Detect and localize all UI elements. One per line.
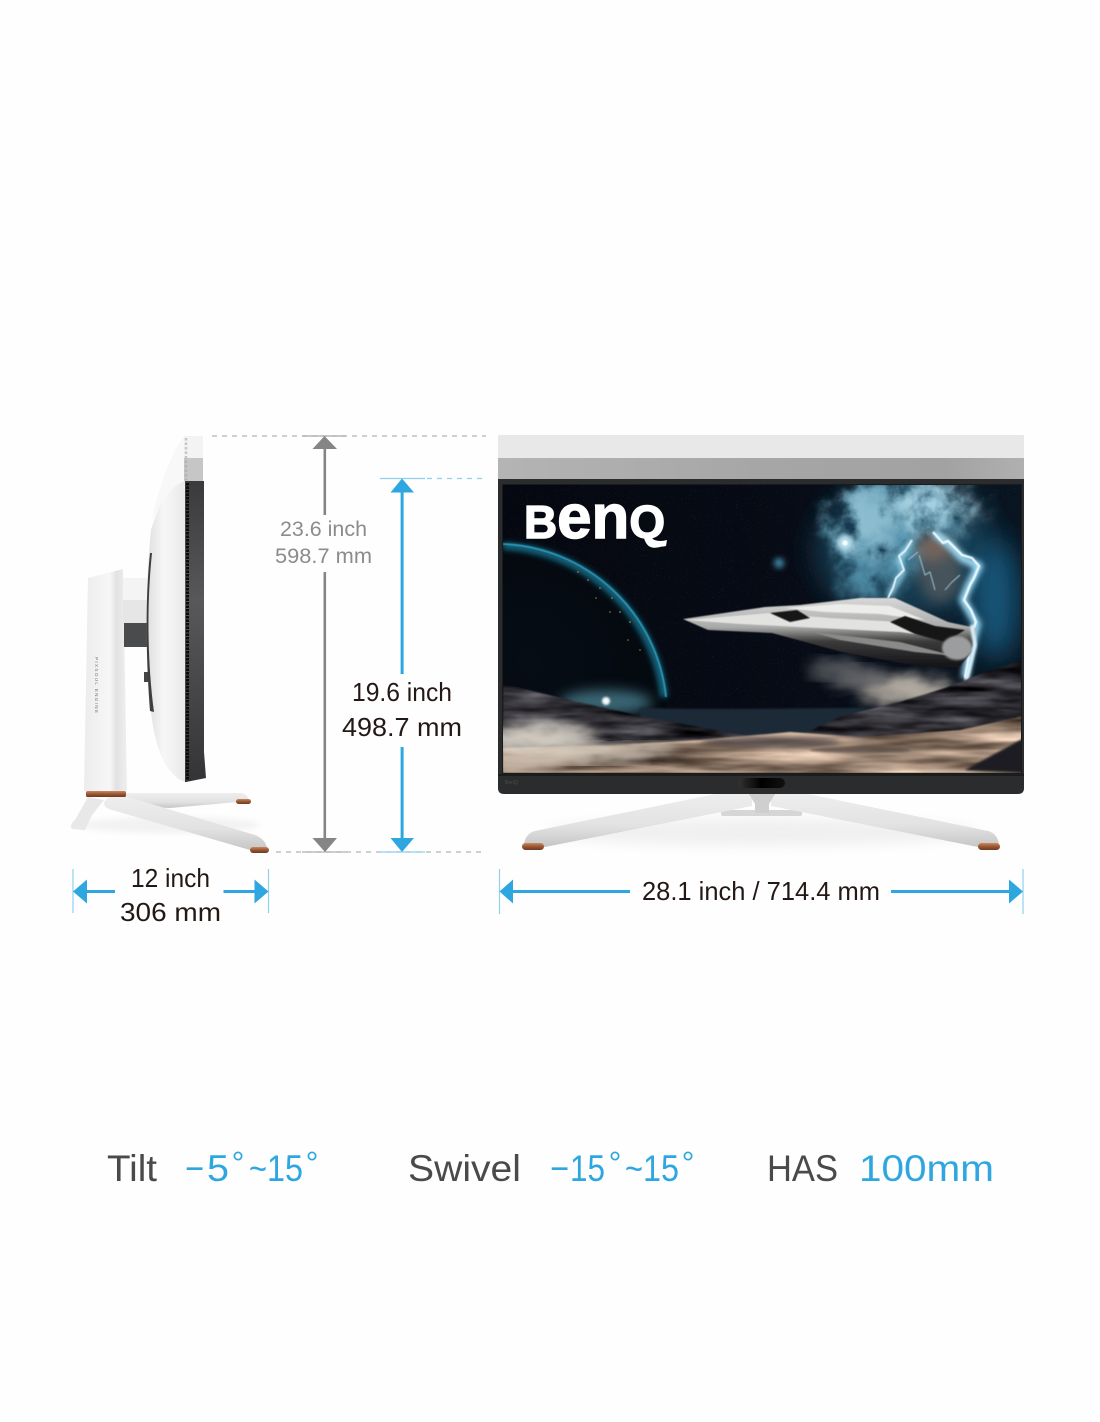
total height label: 23.6 inch	[280, 518, 367, 541]
front view monitor	[498, 435, 1024, 850]
monitor chin details: BenQ	[505, 780, 518, 786]
logo on screen: BenQ	[524, 483, 665, 552]
side view monitor	[71, 436, 269, 853]
side stand legs	[71, 793, 267, 850]
swivel spec: −	[550, 1148, 569, 1189]
column lettering: PIXSOUL ENGINE	[94, 657, 99, 713]
horizon glow	[560, 690, 652, 714]
swivel spec	[408, 1145, 694, 1189]
screen inner border	[502, 484, 1022, 774]
side depth label: 12 inch	[131, 863, 210, 893]
side depth arrows	[73, 869, 268, 913]
starfield	[503, 485, 1021, 725]
side depth label: 306 mm	[120, 897, 221, 927]
screen height label: 498.7 mm	[342, 712, 462, 742]
left dune	[503, 685, 747, 748]
height dashed guides	[212, 436, 487, 852]
front stand	[522, 794, 1000, 850]
side hinge arm	[123, 578, 149, 682]
spaceship	[683, 598, 976, 668]
height adjustment spec: 100mm	[859, 1148, 994, 1189]
lightning glow	[889, 532, 979, 678]
total height label	[275, 518, 372, 568]
front monitor bezel	[498, 479, 1024, 794]
total height arrow	[312, 436, 337, 852]
side stand column	[84, 569, 127, 797]
height adjustment spec: HAS	[767, 1148, 838, 1189]
screen height label: 19.6 inch	[352, 677, 452, 707]
side monitor rear shell	[147, 481, 185, 782]
front raised height ghost	[498, 435, 1024, 479]
screen height label	[342, 677, 462, 742]
logo on screen	[526, 504, 667, 548]
swivel spec: 15	[570, 1148, 605, 1189]
side depth label	[120, 863, 221, 927]
screen height arrow	[390, 478, 414, 852]
tilt spec: ~	[249, 1148, 267, 1189]
infographic canvas	[71, 435, 1024, 1182]
dust clouds	[808, 660, 955, 704]
swivel spec: Swivel	[408, 1148, 521, 1189]
screen artwork	[503, 485, 1021, 773]
swivel spec: 15	[643, 1148, 679, 1189]
side stand feet	[236, 799, 269, 853]
tilt spec: 15	[267, 1148, 303, 1189]
tilt spec: °	[306, 1145, 318, 1181]
planet	[503, 539, 671, 714]
front width label: 28.1 inch / 714.4 mm	[642, 876, 880, 906]
tilt spec: 5	[207, 1148, 229, 1189]
rear bracket strip	[147, 553, 154, 712]
sand floor	[503, 716, 1024, 773]
lightning bolts	[888, 532, 979, 678]
total height label: 598.7 mm	[275, 545, 372, 568]
front width arrow	[500, 869, 1023, 914]
side monitor front edge	[185, 481, 206, 782]
lightning base	[966, 625, 975, 682]
swivel spec: °	[609, 1145, 621, 1181]
nebula	[774, 478, 1019, 660]
monitor chin details	[498, 775, 1024, 788]
left mist	[482, 725, 680, 772]
right dune	[800, 660, 1024, 773]
tilt spec: Tilt	[107, 1148, 158, 1189]
height adjustment spec	[767, 1148, 994, 1189]
raised height ghost of side monitor	[152, 436, 203, 520]
tilt spec: °	[232, 1145, 244, 1181]
tilt spec	[107, 1145, 318, 1189]
distant plain	[640, 708, 868, 736]
sand shadows	[700, 737, 1024, 773]
tilt spec: −	[185, 1148, 204, 1189]
swivel spec: ~	[625, 1148, 643, 1189]
swivel spec: °	[682, 1145, 694, 1181]
